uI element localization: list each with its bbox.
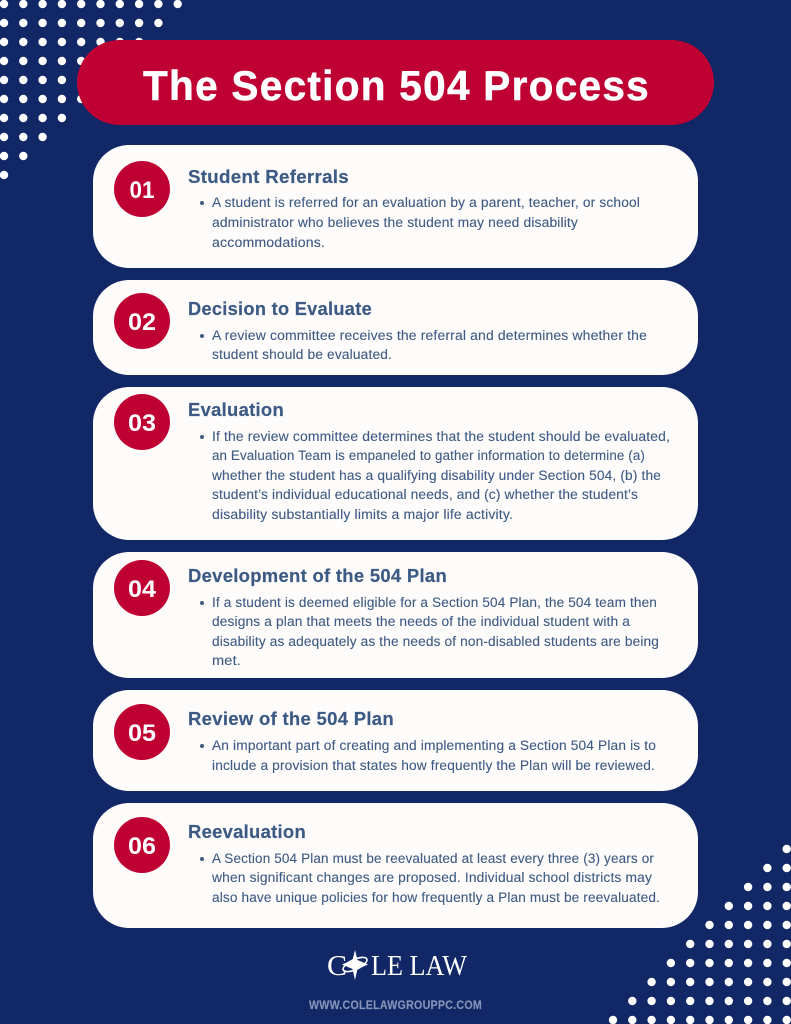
step number 02: 02 (128, 309, 156, 336)
icon: star and orbit (341, 950, 369, 980)
heading: Review of the 504 Plan (188, 708, 394, 729)
panel: step 03 evaluation (93, 387, 698, 540)
dot pattern: top left (4, 4, 179, 175)
panel: step 06 reevaluation (93, 803, 698, 928)
step number 05 (114, 704, 170, 760)
body text: A student is referred for an evaluation by a parent, teacher, or school (212, 195, 640, 211)
body text: administrator who believes the student may need disability (212, 215, 579, 231)
logo: Cole Law: LE LAW (371, 950, 468, 982)
heading: Evaluation (188, 399, 284, 420)
panel: step 04 development of the 504 plan (93, 552, 698, 678)
body text: disability as adequately as the needs of non-disabled students are being (212, 634, 659, 650)
step number 05: 05 (128, 720, 156, 747)
step number 06: 06 (128, 833, 156, 860)
body text (200, 195, 640, 251)
body text: an Evaluation Team is empaneled to gather information to determine (a) (212, 448, 645, 464)
body text: met. (212, 653, 241, 669)
panel: step 02 decision to evaluate (93, 280, 698, 375)
body text: An important part of creating and implementing a Section 504 Plan is to (212, 738, 656, 754)
body text: If a student is deemed eligible for a Section 504 Plan, the 504 team then (212, 595, 657, 611)
title banner (77, 40, 714, 125)
dot pattern: bottom right (612, 849, 787, 1020)
step number 01: 01 (130, 177, 154, 204)
step number 03 (114, 394, 170, 450)
step number 02 (114, 293, 170, 349)
logo: Cole Law: C (327, 950, 347, 982)
body text: also have unique policies for how frequently a Plan must be reevaluated. (212, 890, 660, 906)
body text: A Section 504 Plan must be reevaluated at least every three (3) years or (212, 851, 654, 867)
panel: step 05 review of the 504 plan (93, 690, 698, 791)
body text (200, 429, 670, 523)
step number 06 (114, 817, 170, 873)
body text: student should be evaluated. (212, 347, 392, 363)
body text: whether the student has a qualifying disability under Section 504, (b) the (211, 468, 661, 484)
logo: Cole Law (327, 950, 468, 982)
body text (200, 738, 656, 774)
heading: Development of the 504 Plan (188, 565, 447, 586)
body text: accommodations. (212, 235, 325, 251)
body text: disability substantially limits a major life activity. (212, 507, 513, 523)
step number 03: 03 (128, 410, 156, 437)
body text: If the review committee determines that the student should be evaluated, (212, 429, 670, 445)
step number 01 (114, 161, 170, 217)
title text: The Section 504 Process (143, 62, 650, 109)
body text (200, 328, 647, 363)
heading: Reevaluation (188, 821, 306, 842)
step number 04: 04 (128, 576, 156, 603)
step number 04 (114, 560, 170, 616)
heading: Decision to Evaluate (188, 298, 372, 319)
body text: student’s individual educational needs, and (c) whether the student’s (212, 487, 638, 503)
website url: WWW.COLELAWGROUPPC.COM (309, 1000, 482, 1012)
body text: when significant changes are proposed. Individual school districts may (211, 870, 653, 886)
body text (200, 595, 659, 669)
body text (200, 851, 660, 906)
panel: step 01 student referrals (93, 145, 698, 268)
heading: Student Referrals (188, 166, 349, 187)
body text: designs a plan that meets the needs of the individual student with a (212, 614, 630, 630)
body text: include a provision that states how frequently the Plan will be reviewed. (212, 758, 655, 774)
body text: A review committee receives the referral and determines whether the (212, 328, 647, 344)
